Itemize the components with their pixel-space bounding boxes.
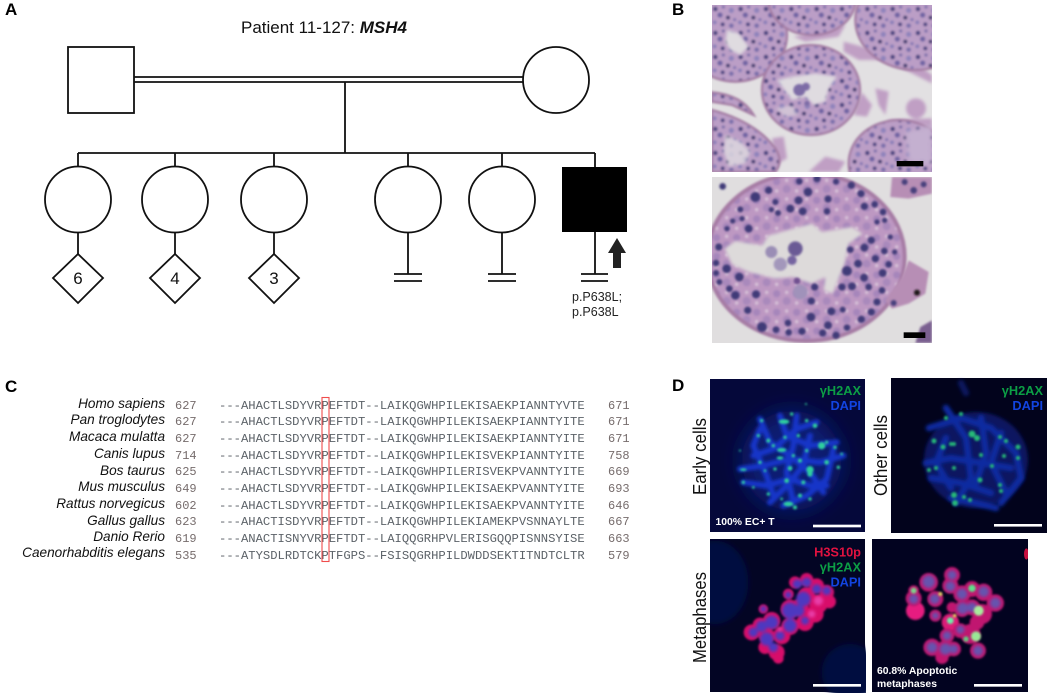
channel labels: DAPI — [1012, 398, 1043, 413]
species names: Rattus norvegicus — [56, 496, 165, 511]
aligned sequences: ---AHACTLSDYVRPEFTDT--LAIKQGWHPILERISVEKPVANNTYITE — [219, 465, 585, 479]
species names — [22, 396, 165, 560]
scale bar — [904, 332, 925, 338]
row label other cells: Other cells — [870, 415, 891, 496]
proband affected — [562, 167, 627, 281]
panel: histology low magnification — [684, 0, 975, 207]
gamma H2AX signals — [911, 585, 984, 642]
H3S10p chromosomes — [906, 567, 1004, 664]
aligned sequences: ---AHACTLSDYVRPEFTDT--LAIKQGWHPILEKISAEKPVANNTYITE — [219, 482, 585, 496]
aligned sequences: ---ATYSDLRDTCKPTFGPS--FSISQGRHPILDWDDSEKTITNDTCLTR — [219, 549, 585, 563]
channel labels: γH2AX — [820, 383, 861, 398]
species names: Pan troglodytes — [71, 412, 165, 427]
lumen cell clusters — [765, 241, 808, 299]
background nuclei — [710, 539, 866, 693]
end positions: 693 — [608, 482, 630, 496]
start positions: 623 — [175, 515, 197, 529]
panel label B: B — [672, 0, 684, 19]
aligned sequences: ---AHACTISDYVRPEFTDT--LAIKQGWHPILEKIAMEKPVSNNAYLTE — [219, 515, 585, 529]
gamma H2AX foci — [739, 403, 843, 509]
start positions: 627 — [175, 399, 197, 413]
end positions: 671 — [608, 399, 630, 413]
interstitial tissue — [772, 25, 932, 172]
species names: Gallus gallus — [87, 513, 165, 528]
DAPI strands — [740, 416, 843, 506]
proband arrow — [608, 238, 626, 268]
variant label: p.P638L; — [572, 290, 622, 304]
background red spot — [1024, 548, 1029, 560]
percentage note: 100% EC+ T — [715, 517, 775, 528]
species names: Canis lupus — [94, 446, 165, 461]
note text: metaphases — [877, 679, 937, 690]
channel labels: H3S10p — [814, 544, 861, 559]
scale bar — [897, 161, 923, 166]
end positions: 669 — [608, 465, 630, 479]
channel labels: γH2AX — [820, 559, 861, 574]
sibling 1 — [45, 166, 111, 303]
nucleus halo — [742, 411, 842, 511]
species names: Macaca mulatta — [69, 429, 165, 444]
channel labels: DAPI — [830, 574, 861, 589]
nuclei — [713, 175, 897, 339]
panel: early cells immunofluorescence — [710, 379, 865, 532]
variant label: p.P638L — [572, 305, 619, 319]
sibling 3: 3 — [269, 269, 279, 288]
lavender degraded tubule area — [905, 125, 932, 165]
row label metaphases: Metaphases — [689, 572, 710, 663]
start positions: 602 — [175, 499, 197, 513]
end positions: 667 — [608, 515, 630, 529]
sibling 1: 6 — [73, 269, 83, 288]
aligned sequences: ---ANACTISNYVRPEFTDT--LAIQQGRHPVLERISGQQPISNNSYISE — [219, 532, 585, 546]
start positions — [175, 399, 197, 563]
nucleus backdrop — [924, 412, 1028, 508]
end positions: 758 — [608, 449, 630, 463]
red box on conserved proline — [322, 398, 329, 562]
aligned sequences: ---AHACTLSDYVRPEFTDT--LAIKQGWHPILEKISAEKPIANNTYITE — [219, 415, 585, 429]
residual lumen cells — [793, 83, 810, 106]
seminiferous tubule — [707, 173, 905, 341]
start positions: 649 — [175, 482, 197, 496]
species names: Homo sapiens — [78, 396, 165, 411]
sibling 4 infertile — [375, 166, 441, 281]
interstitial tissue — [885, 177, 932, 343]
end positions — [608, 399, 630, 563]
channel labels — [1002, 383, 1043, 413]
panel: metaphases immunofluorescence — [710, 539, 866, 693]
DAPI strands — [926, 383, 1021, 508]
channel labels: γH2AX — [1002, 383, 1043, 398]
start positions: 535 — [175, 549, 197, 563]
channel labels: DAPI — [830, 398, 861, 413]
channel labels — [820, 386, 861, 410]
panel: histology high magnification — [707, 173, 932, 343]
end positions: 646 — [608, 499, 630, 513]
panel: sequence alignment — [22, 396, 630, 563]
sibling 2 — [142, 166, 208, 303]
end positions: 671 — [608, 432, 630, 446]
scale bar — [813, 684, 861, 687]
sibling 3 — [241, 166, 307, 303]
species names: Mus musculus — [78, 479, 165, 494]
aligned sequences: ---AHACTLSDYVRPEFTDT--LAIKQGWHPILEKISAEKPIANNTYVTE — [219, 399, 585, 413]
aligned sequences: ---AHACTLSDYVRPEFTDT--LAIKQGWHPILEKISAEKPIANNTYITE — [219, 432, 585, 446]
pedigree title: Patient 11-127: MSH4 — [241, 18, 408, 37]
pedigree connecting lines — [78, 77, 595, 167]
panel label D: D — [672, 376, 684, 395]
start positions: 627 — [175, 415, 197, 429]
aligned sequences: ---AHACTLSDYVRPEFTDT--LAIKQGWHPILEKISVEKPIANNTYITE — [219, 449, 585, 463]
species names: Bos taurus — [100, 463, 165, 478]
aligned sequences: ---AHACTLSDYVRPEFTDT--LAIKQGWHPILEKISAEKPVANNTYITE — [219, 499, 585, 513]
gamma H2AX foci — [927, 412, 1020, 506]
species names: Caenorhabditis elegans — [22, 545, 165, 560]
interstitial nuclei — [891, 179, 927, 306]
aligned sequences — [219, 399, 585, 563]
panel: apoptotic metaphases immunofluorescence — [872, 539, 1029, 692]
magenta highlights — [778, 596, 823, 631]
start positions: 714 — [175, 449, 197, 463]
panel: pedigree — [45, 18, 627, 319]
H3S10p chromosome rims — [744, 573, 836, 664]
sibling 5 infertile — [469, 166, 535, 281]
channel labels — [815, 548, 861, 586]
father — [68, 47, 134, 113]
DAPI core — [909, 570, 1001, 656]
start positions: 625 — [175, 465, 197, 479]
scale bar — [994, 524, 1042, 527]
tubules — [712, 5, 932, 172]
row label early cells: Early cells — [689, 418, 710, 495]
scale bar — [813, 525, 861, 527]
lumens — [724, 30, 837, 167]
panel label A: A — [5, 0, 17, 19]
sibling 2: 4 — [170, 269, 180, 288]
start positions: 627 — [175, 432, 197, 446]
species names: Danio Rerio — [93, 529, 165, 544]
note text: 60.8% Apoptotic — [877, 666, 958, 677]
start positions: 619 — [175, 532, 197, 546]
lumen — [725, 224, 863, 294]
panel: other cells immunofluorescence — [891, 378, 1047, 533]
DAPI chromosome core — [749, 578, 831, 652]
end positions: 579 — [608, 549, 630, 563]
panel label C: C — [5, 377, 17, 396]
mother — [523, 47, 589, 113]
scale bar — [974, 684, 1022, 687]
end positions: 671 — [608, 415, 630, 429]
end positions: 663 — [608, 532, 630, 546]
